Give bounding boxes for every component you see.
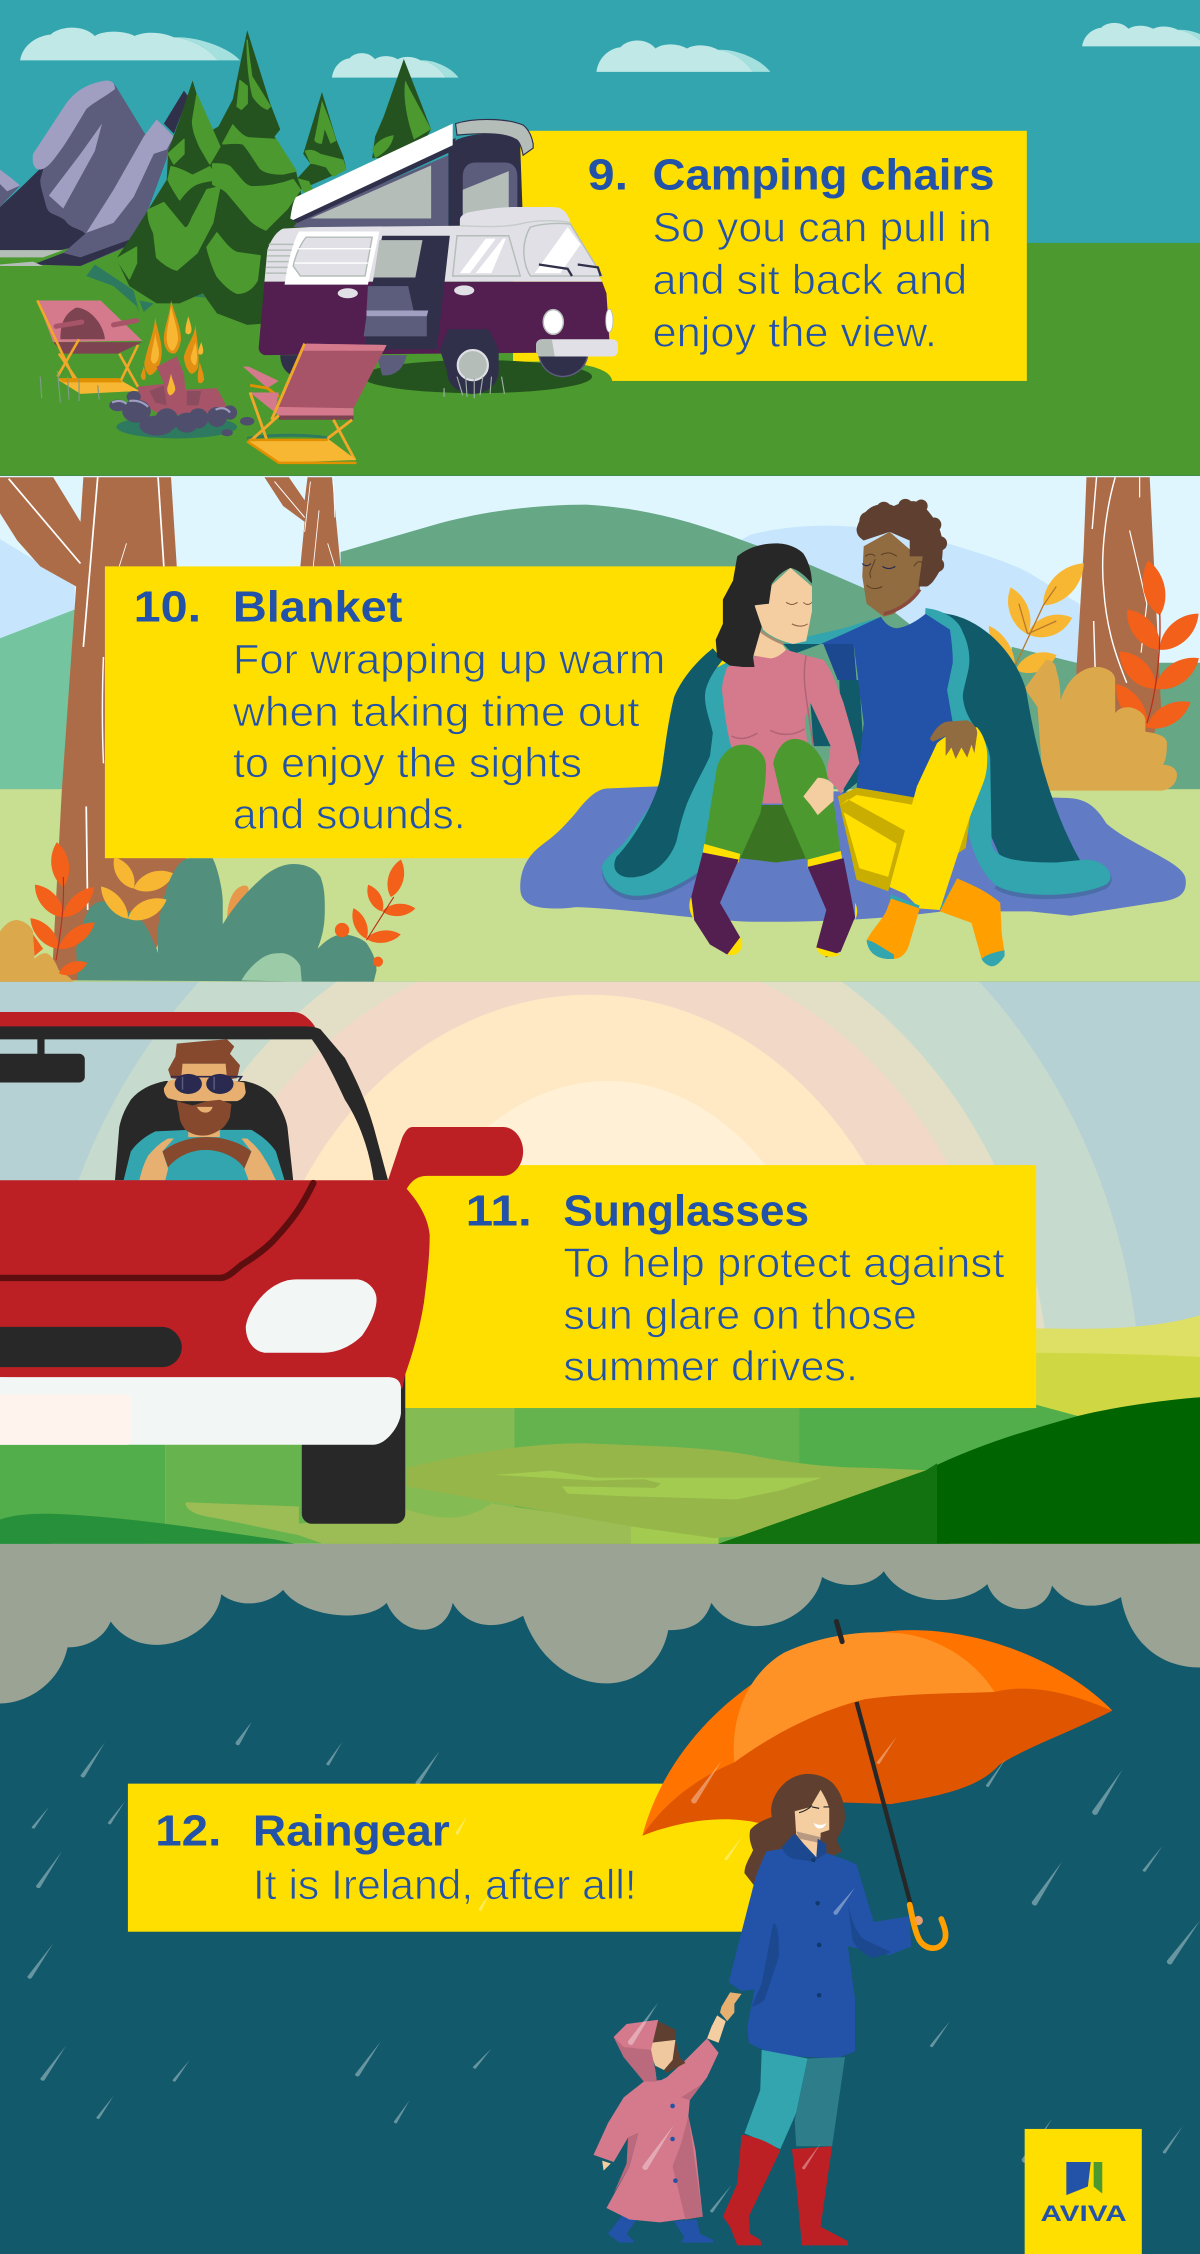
callout: raingear: Raingear — [253, 1808, 450, 1856]
callout: blanket: For wrapping up warm — [233, 635, 665, 682]
picnic rug — [520, 786, 1186, 922]
callout: raingear: 12. — [155, 1808, 221, 1856]
panel: blanket — [0, 476, 1200, 982]
mountains — [0, 80, 188, 266]
bush and leaves: bottom left — [0, 841, 416, 982]
umbrella — [642, 1622, 1112, 1906]
callout: blanket: Blanket — [233, 584, 402, 632]
umbrella handle — [910, 1905, 946, 1948]
blanket cloak — [602, 608, 1112, 900]
callout: sunglasses: sun glare on those — [563, 1291, 917, 1338]
campervan — [259, 119, 618, 398]
callout: blanket: 10. — [134, 584, 201, 632]
sprig: yellow right — [988, 563, 1084, 673]
woman — [720, 1774, 911, 2245]
callout: blanket — [105, 566, 737, 858]
panel: raingear — [0, 1544, 1200, 2254]
child — [594, 2015, 726, 2242]
callout: camping chairs: Camping chairs — [652, 152, 994, 200]
Aviva logo: AVIVA — [1040, 2201, 1127, 2226]
couple under blanket — [602, 499, 1112, 966]
background hills — [0, 505, 1200, 982]
callout: sunglasses — [402, 1165, 1036, 1408]
callout: sunglasses: Sunglasses — [563, 1187, 809, 1235]
clouds — [20, 23, 1200, 78]
trees — [0, 477, 1161, 980]
woman — [689, 543, 859, 957]
panel: camping chairs — [0, 0, 1200, 476]
callout: blanket: when taking time out — [232, 688, 640, 735]
callout: sunglasses: summer drives. — [563, 1343, 858, 1390]
sun glow rings — [52, 982, 1136, 1544]
landscape — [0, 1315, 1200, 1545]
callout: raingear — [128, 1784, 767, 1932]
callout: raingear: It is Ireland, after all! — [253, 1861, 637, 1908]
callout: camping chairs — [513, 131, 1027, 381]
callout: sunglasses: To help protect against — [563, 1239, 1005, 1286]
teal ground shadow by trees — [86, 264, 206, 313]
Aviva logo — [1025, 2129, 1142, 2254]
chair: left — [37, 300, 142, 402]
raindrops — [27, 1722, 1200, 2212]
panel: sunglasses — [0, 982, 1200, 1544]
pine trees — [116, 30, 431, 325]
chair: right — [243, 344, 387, 463]
callout: camping chairs: 9. — [588, 152, 628, 200]
driver — [115, 1039, 293, 1180]
callout: sunglasses: 11. — [466, 1187, 532, 1235]
callout: camping chairs: enjoy the view. — [652, 308, 937, 355]
man — [821, 499, 1005, 966]
sprig: orange right — [1120, 560, 1199, 729]
callout: blanket: to enjoy the sights — [233, 739, 582, 786]
car — [0, 1012, 523, 1524]
campfire — [109, 300, 254, 438]
callout: camping chairs: So you can pull in — [652, 203, 992, 251]
callout: camping chairs: and sit back and — [652, 256, 967, 303]
woman and child — [594, 1774, 946, 2245]
bush: right — [1025, 660, 1177, 791]
storm clouds — [0, 1544, 1200, 1703]
callout: blanket: and sounds. — [233, 791, 466, 838]
